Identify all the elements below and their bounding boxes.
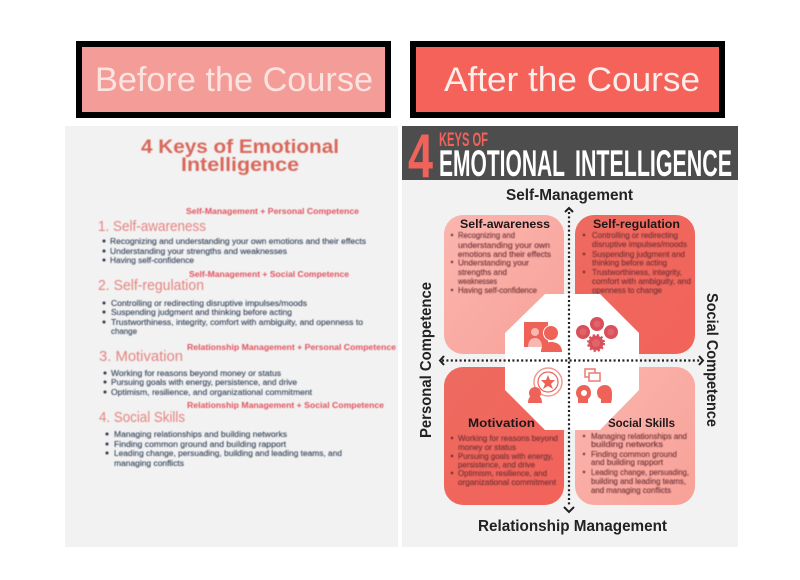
banner: after the course (413, 44, 722, 115)
section 4: social skills: Managing relationships and building networks (114, 429, 287, 439)
header band: 4 Keys of Emotional Intelligence: KEYS OF (439, 130, 488, 151)
section 4: social skills: Leading change, persuading, building and leading teams, and (114, 448, 342, 458)
quadrant: self-regulation: Self-regulation (593, 219, 680, 231)
quadrant: self-regulation: Trustworthiness, integrity, (592, 268, 682, 277)
quadrant: social skills: building and leading teams, (591, 477, 686, 486)
section 1: self-awareness: Understanding your strengths and weaknesses (110, 246, 287, 256)
title: 4 Keys of Emotional Intelligence: Intelligence (181, 155, 299, 176)
axis label: relationship management: Relationship Management (478, 518, 667, 535)
panel: before the course document (65, 126, 398, 547)
section 3: motivation: 3. Motivation (99, 348, 183, 365)
header band: 4 Keys of Emotional Intelligence: 4 (408, 122, 433, 191)
quadrant: self-awareness: Having self-confidence (458, 286, 538, 295)
quadrant: social skills: and managing conflicts (591, 486, 671, 495)
axis label: social competence: Social Competence (703, 293, 720, 427)
section 1: self-awareness: Having self-confidence (110, 255, 194, 265)
section 2: self-regulation: 2. Self-regulation (98, 277, 204, 294)
section 3: motivation: Pursuing goals with energy, persistence, and drive (111, 377, 297, 387)
quadrant: motivation (444, 367, 564, 505)
quadrant: social skills (575, 367, 695, 505)
section 1: self-awareness: Recognizing and understanding your own emotions and their effects (110, 236, 366, 246)
panel: after the course infographic (402, 122, 738, 547)
section 3: motivation: Relationship Management + Personal Competence (187, 343, 397, 352)
section 4: social skills: managing conflicts (114, 458, 184, 468)
section 3: motivation (99, 343, 397, 397)
quadrant: social skills: Leading change, persuading, (591, 468, 689, 477)
quadrant: social skills: Managing relationships and (591, 432, 687, 441)
quadrant: self-awareness: emotions and their effects (458, 250, 551, 259)
header band: 4 Keys of Emotional Intelligence: EMOTIONAL (439, 143, 565, 184)
section 2: self-regulation: Suspending judgment and thinking before acting (111, 307, 292, 317)
section 4: social skills (99, 401, 385, 468)
section 4: social skills: Finding common ground and building rapport (114, 439, 287, 449)
quadrant: social skills: Social Skills (608, 418, 675, 430)
quadrant: self-awareness (444, 215, 564, 354)
arrow: horizontal dotted axis (440, 356, 703, 365)
icon: four skill circles and gear (576, 317, 618, 350)
axis label: personal competence: Personal Competence (418, 282, 435, 438)
section 1: self-awareness (98, 207, 366, 265)
quadrant: social skills: and building rapport (591, 458, 664, 467)
quadrant: motivation: Optimism, resilience, and (458, 469, 547, 478)
quadrant: self-regulation: thinking before acting (592, 258, 667, 268)
quadrant: motivation: organizational commitment (458, 478, 557, 487)
title: 4 Keys of Emotional Intelligence (141, 137, 339, 176)
quadrant: self-awareness: Self-awareness (460, 219, 550, 231)
axis label: self-management: Self-Management (506, 187, 633, 204)
section 2: self-regulation: Controlling or redirecting disruptive impulses/moods (111, 298, 307, 308)
quadrant: self-regulation: disruptive impulses/moods (592, 240, 687, 249)
section 3: motivation: Optimism, resilience, and organizational commitment (111, 387, 313, 397)
quadrant: self-regulation: Suspending judgment and (592, 250, 685, 259)
quadrant: self-awareness: Understanding your (458, 258, 529, 268)
section 3: motivation: Working for reasons beyond money or status (111, 368, 281, 378)
section 4: social skills: Relationship Management + Social Competence (187, 401, 385, 410)
quadrant: motivation: Working for reasons beyond (458, 434, 558, 443)
quadrant: motivation: money or status (458, 443, 516, 452)
quadrant: motivation: persistence, and drive (458, 460, 536, 470)
banner: before the course: Before the Course (95, 61, 373, 99)
quadrant: self-regulation: openness to change (592, 286, 663, 295)
header band: 4 Keys of Emotional Intelligence (402, 122, 738, 191)
section 4: social skills: 4. Social Skills (99, 409, 185, 426)
icon: two heads with chat bubbles (576, 369, 612, 403)
icon: star target and hand (528, 368, 562, 403)
quadrant: social skills: Finding common ground (591, 450, 677, 459)
icon: presenter and audience (524, 322, 562, 352)
section 2: self-regulation: Self-Management + Social Competence (189, 270, 350, 279)
quadrant: self-regulation: Controlling or redirecting (592, 231, 678, 240)
quadrant: self-regulation (575, 215, 695, 354)
section 1: self-awareness: Self-Management + Personal Competence (186, 207, 360, 216)
quadrant: motivation: Motivation (468, 418, 535, 430)
banner: before the course (79, 44, 388, 115)
quadrant: motivation: Pursuing goals with energy, (458, 452, 553, 461)
quadrant: self-awareness: understanding your own (458, 241, 550, 250)
central white octagon (505, 294, 639, 430)
section 2: self-regulation: change (111, 326, 137, 336)
arrow: vertical dotted axis (564, 208, 574, 512)
section 2: self-regulation (98, 270, 363, 336)
quadrant: self-awareness: strengths and (458, 268, 507, 277)
quadrant: self-regulation: comfort with ambiguity, and (592, 277, 691, 286)
section 1: self-awareness: 1. Self-awareness (98, 218, 206, 235)
quadrant: self-awareness: Recognizing and (458, 231, 515, 240)
title: 4 Keys of Emotional Intelligence: 4 Keys of Emotional (141, 137, 339, 158)
banner: after the course: After the Course (444, 61, 700, 99)
quadrant: social skills: building networks (591, 440, 663, 449)
section 2: self-regulation: Trustworthiness, integrity, comfort with ambiguity, and openness to (111, 317, 363, 327)
quadrant: self-awareness: weaknesses (457, 277, 497, 286)
